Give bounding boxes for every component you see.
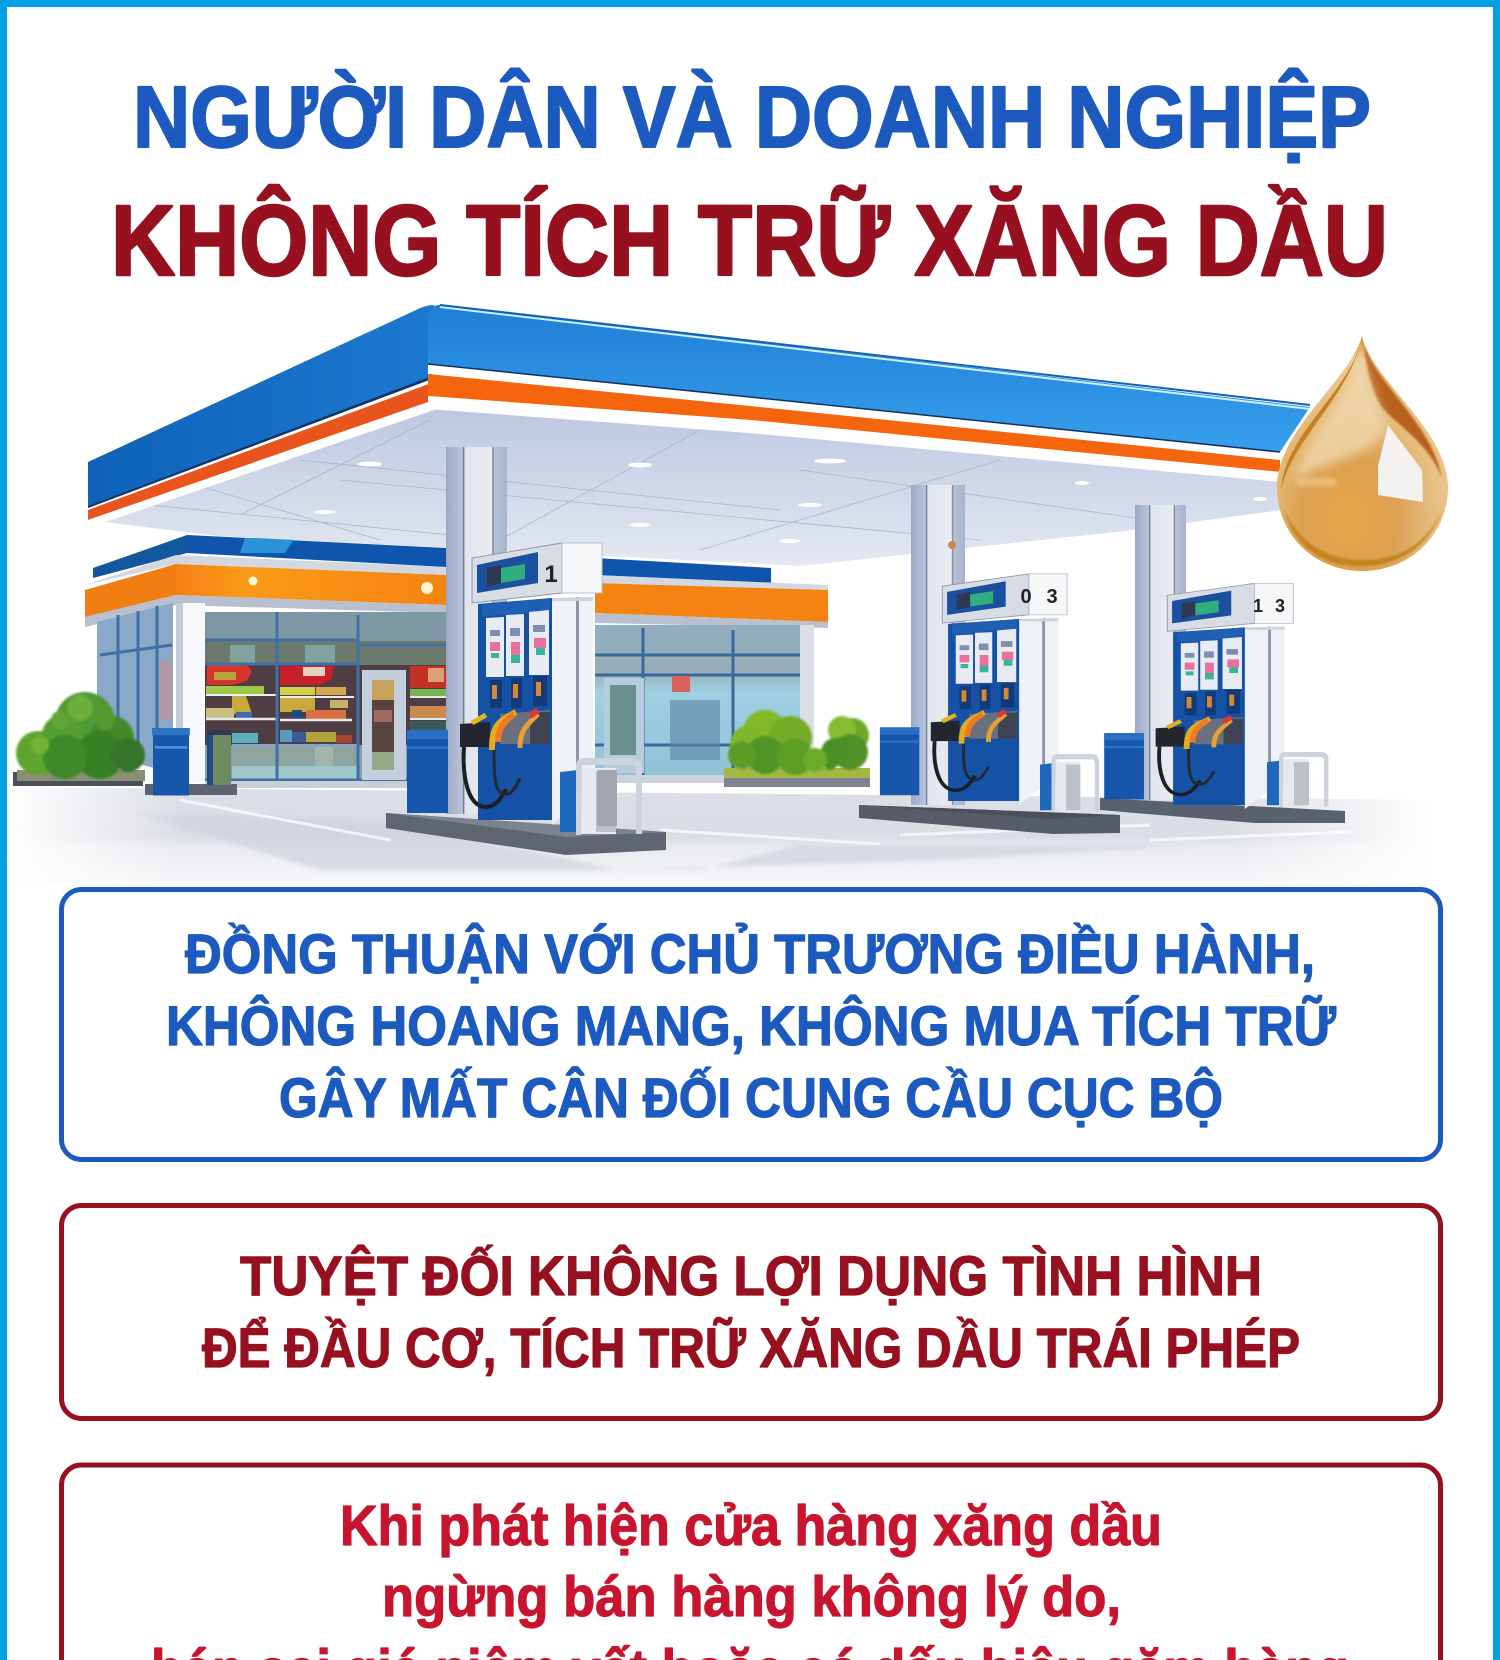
panel: consensus message <box>62 890 1440 1160</box>
panel: reporting message <box>62 1465 1440 1660</box>
store bins <box>152 728 231 796</box>
side windows <box>97 603 173 773</box>
icon: oil droplet <box>1277 336 1448 571</box>
pump island 3: 3 <box>1275 596 1285 616</box>
canopy <box>88 305 1310 566</box>
pump island 3: 1 <box>1253 596 1263 616</box>
left bush and planter <box>13 692 237 795</box>
panel: no speculation message <box>62 1206 1440 1418</box>
columns <box>446 447 1186 814</box>
panel text line 1: ĐỒNG THUẬN VỚI CHỦ TRƯƠNG ĐIỀU HÀNH, <box>185 922 1315 985</box>
title <box>111 69 1388 297</box>
pump island 2: 0 <box>1020 586 1032 608</box>
panel text line 3: GÂY MẤT CÂN ĐỐI CUNG CẦU CỤC BỘ <box>279 1066 1223 1129</box>
pump island 1 <box>386 543 666 855</box>
panel text line 2: ngừng bán hàng không lý do, <box>382 1565 1121 1629</box>
ceiling lights <box>314 458 1267 554</box>
store building <box>85 535 828 788</box>
ground <box>7 780 1493 886</box>
canopy front face <box>428 305 1310 452</box>
pump island 2 <box>859 574 1120 834</box>
right window <box>595 625 800 775</box>
pump island 1: 1 <box>544 561 558 588</box>
store door <box>362 670 406 780</box>
canopy ceiling <box>88 408 1281 566</box>
panel text line 1: TUYỆT ĐỐI KHÔNG LỢI DỤNG TÌNH HÌNH <box>240 1244 1262 1307</box>
panel text line 2: KHÔNG HOANG MANG, KHÔNG MUA TÍCH TRỮ <box>166 994 1336 1057</box>
title line 1: NGƯỜI DÂN VÀ DOANH NGHIỆP <box>133 69 1371 166</box>
pump island 2: 3 <box>1046 586 1058 608</box>
canopy left face <box>88 305 434 508</box>
right bush and planter <box>724 710 870 787</box>
front window with shelves <box>205 612 446 780</box>
panel text line 2: ĐỂ ĐẦU CƠ, TÍCH TRỮ XĂNG DẦU TRÁI PHÉP <box>202 1316 1300 1379</box>
illustration: petrol station <box>7 305 1493 886</box>
pump island 3 <box>1100 583 1345 823</box>
panel text line 1: Khi phát hiện cửa hàng xăng dầu <box>340 1494 1162 1558</box>
